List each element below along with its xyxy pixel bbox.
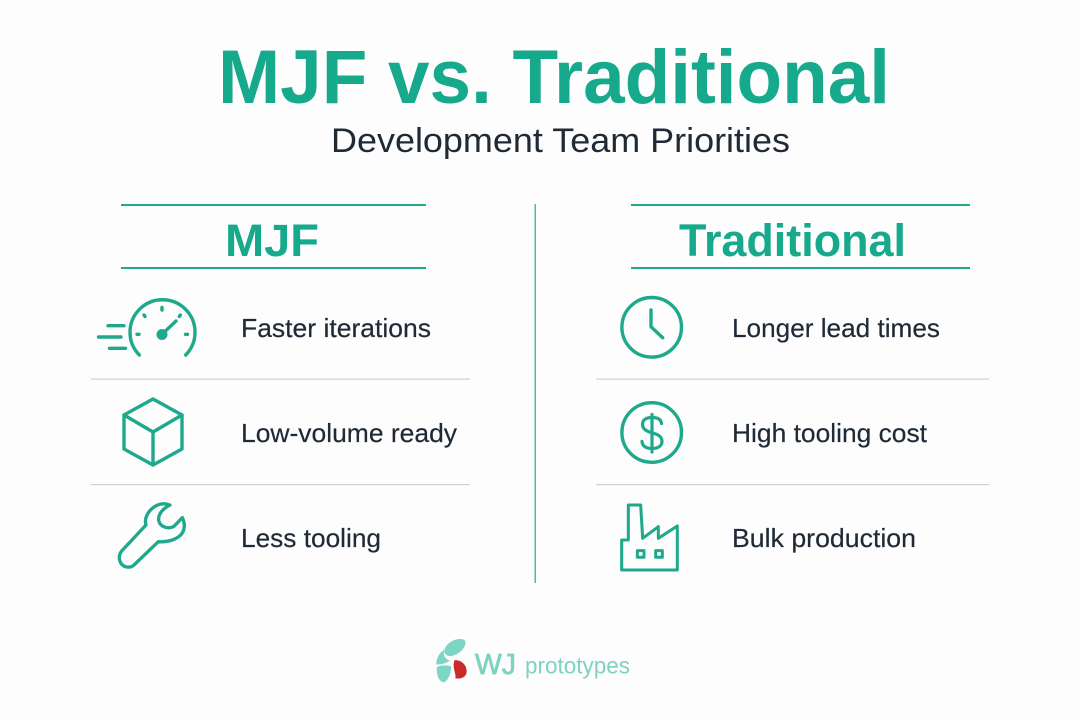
logo mark [436, 639, 467, 682]
icon: dollar [622, 403, 682, 462]
icon: cube [124, 399, 182, 465]
heading: MJF: MJF [225, 215, 319, 266]
center divider [534, 204, 536, 583]
icon: factory [622, 505, 677, 570]
panel: MJF [91, 204, 470, 567]
logo wordmark: WJ [475, 649, 516, 681]
label: Longer lead times: Longer lead times [732, 313, 940, 343]
label: High tooling cost: High tooling cost [732, 418, 928, 448]
icon: speedometer [98, 300, 195, 355]
label: Low-volume ready: Low-volume ready [241, 418, 457, 448]
label: Faster iterations: Faster iterations [241, 313, 431, 343]
label: Less tooling: Less tooling [241, 523, 381, 553]
subtitle: Development Team Priorities [331, 122, 790, 160]
label: Bulk production: Bulk production [732, 523, 916, 553]
logo tagline: prototypes [525, 652, 630, 678]
panel: Traditional [596, 204, 989, 570]
heading: Traditional: Traditional [679, 215, 906, 266]
icon: clock [622, 298, 682, 357]
logo: WJ prototypes [436, 639, 630, 682]
icon: wrench [119, 504, 184, 567]
title: MJF vs. Traditional [218, 35, 890, 120]
